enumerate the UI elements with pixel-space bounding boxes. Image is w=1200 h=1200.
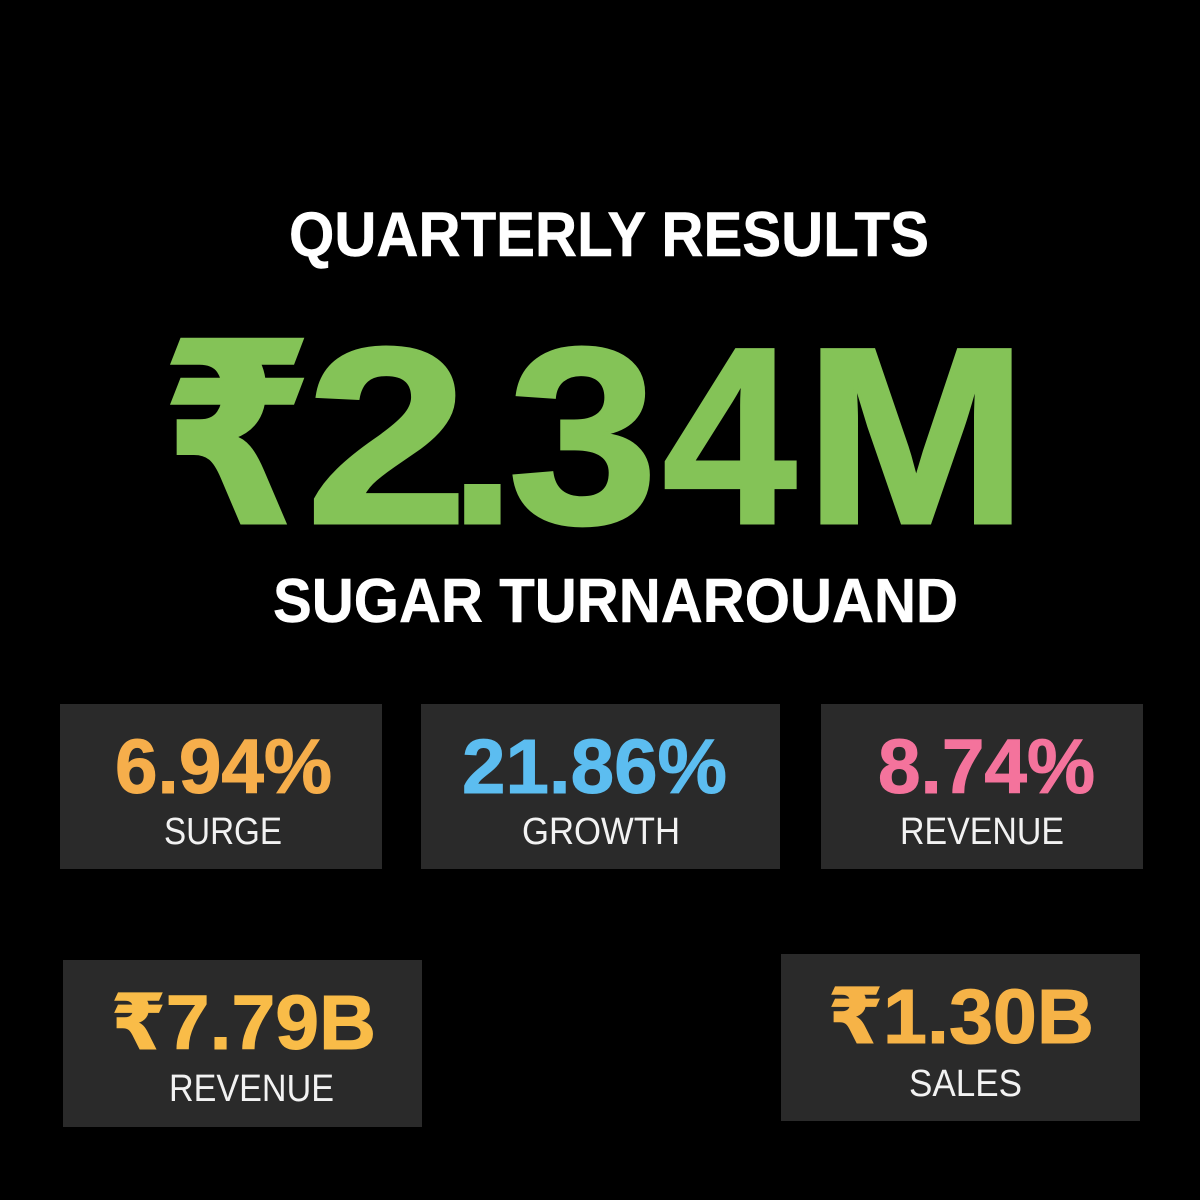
headline figure: 2 [306, 296, 468, 577]
title: QUARTERLY RESULTS [289, 200, 929, 270]
revenue percent value: 8.74% [878, 724, 1095, 810]
panel: growth [421, 704, 780, 869]
headline figure: 4 [662, 296, 796, 577]
headline figure: . [450, 296, 516, 577]
sales value: ₹1.30B [828, 974, 1094, 1060]
headline figure: ₹ [161, 296, 313, 577]
headline figure: M [804, 296, 1028, 577]
panel: revenue amount [63, 960, 422, 1127]
panel: sales [781, 954, 1140, 1121]
headline figure: 3 [508, 296, 658, 577]
revenue percent label: REVENUE [900, 811, 1064, 853]
revenue amount value: ₹7.79B [111, 980, 376, 1066]
panel: surge [60, 704, 382, 869]
revenue amount label: REVENUE [169, 1068, 334, 1110]
panel: revenue percent [821, 704, 1143, 869]
surge value: 6.94% [115, 724, 332, 810]
sales label: SALES [909, 1063, 1022, 1105]
surge label: SURGE [164, 811, 282, 853]
subtitle: SUGAR TURNAROUAND [273, 567, 958, 636]
growth value: 21.86% [462, 724, 727, 810]
growth label: GROWTH [522, 811, 680, 853]
headline figure [161, 296, 1028, 577]
